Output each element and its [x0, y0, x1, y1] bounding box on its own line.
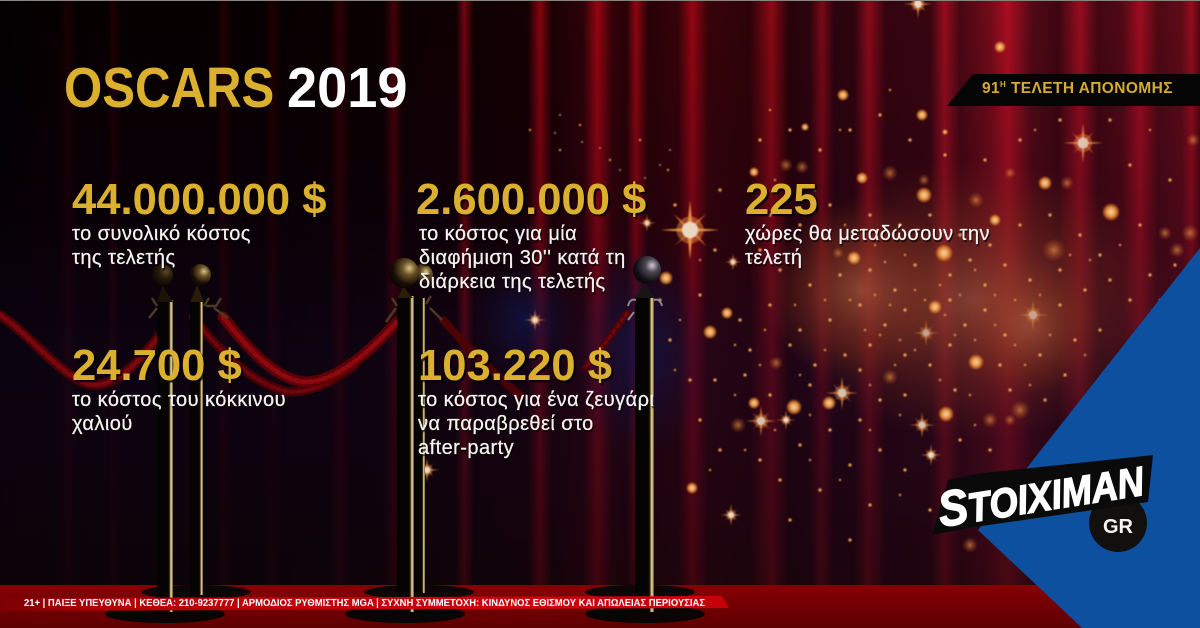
stat: advert cost — [416, 176, 648, 294]
stat: red carpet: 24.700 $ — [72, 342, 242, 390]
title: OSCARS — [64, 56, 274, 120]
logo: Stoiximan GR: STOIXIMAN — [934, 450, 1148, 538]
stat: red carpet: το κόστος του κόκκινου — [72, 389, 286, 411]
stat: after-party — [418, 342, 654, 460]
stat: total cost — [72, 176, 328, 270]
stat: after-party: after-party — [418, 437, 514, 459]
sparkles — [415, 0, 1200, 553]
disclaimer text: 21+ | ΠΑΙΞΕ ΥΠΕΥΘΥΝΑ | ΚΕΘΕΑ: 210-9237777 | ΑΡΜΟΔΙΟΣ ΡΥΘΜΙΣΤΗΣ MGA | ΣΥΧΝΗ ΣΥΜΜΕΤΟΧΗ: ΚΙΝΔΥΝΟΣ ΕΘΙΣΜΟΥ ΚΑΙ ΑΠΩΛΕΙΑΣ ΠΕΡΙΟΥΣΙΑΣ — [24, 597, 705, 609]
stat: countries: 225 — [745, 176, 818, 224]
stanchion: centre pair — [345, 258, 474, 623]
title — [64, 56, 407, 120]
sparkle haze — [470, 160, 1175, 460]
stat: after-party: το κόστος για ένα ζευγάρι — [418, 389, 654, 411]
stat: total cost: της τελετής — [72, 247, 176, 269]
blue corner panel — [978, 248, 1200, 628]
title: 2019 — [287, 56, 407, 120]
red velvet ropes — [0, 313, 627, 395]
stanchion: right — [585, 256, 705, 623]
stat: red carpet — [72, 342, 286, 436]
stat: countries: χώρες θα μεταδώσουν την — [745, 223, 990, 245]
stat: after-party: 103.220 $ — [418, 342, 612, 390]
top right ribbon background — [947, 74, 1200, 106]
stat: red carpet: χαλιού — [72, 413, 133, 435]
red carpet floor — [0, 585, 1200, 628]
stat: countries — [745, 176, 990, 270]
stat: advert cost: διάρκεια της τελετής — [419, 271, 606, 293]
stat: advert cost: 2.600.000 $ — [416, 176, 646, 224]
top edge line — [0, 0, 1200, 1]
disclaimer band background — [0, 596, 729, 611]
logo: Stoiximan GR: GR — [1103, 516, 1134, 538]
stat: advert cost: διαφήμιση 30'' κατά τη — [419, 247, 626, 269]
ribbon label: 91Η ΤΕΛΕΤΗ ΑΠΟΝΟΜΗΣ — [982, 80, 1173, 97]
stat: total cost: 44.000.000 $ — [72, 176, 327, 224]
stanchion: left pair — [105, 264, 251, 623]
stat: after-party: να παραβρεθεί στο — [418, 413, 594, 435]
stat: total cost: το συνολικό κόστος — [72, 223, 251, 245]
stat: countries: τελετή — [745, 247, 802, 269]
stat: advert cost: το κόστος για μία — [419, 223, 577, 245]
